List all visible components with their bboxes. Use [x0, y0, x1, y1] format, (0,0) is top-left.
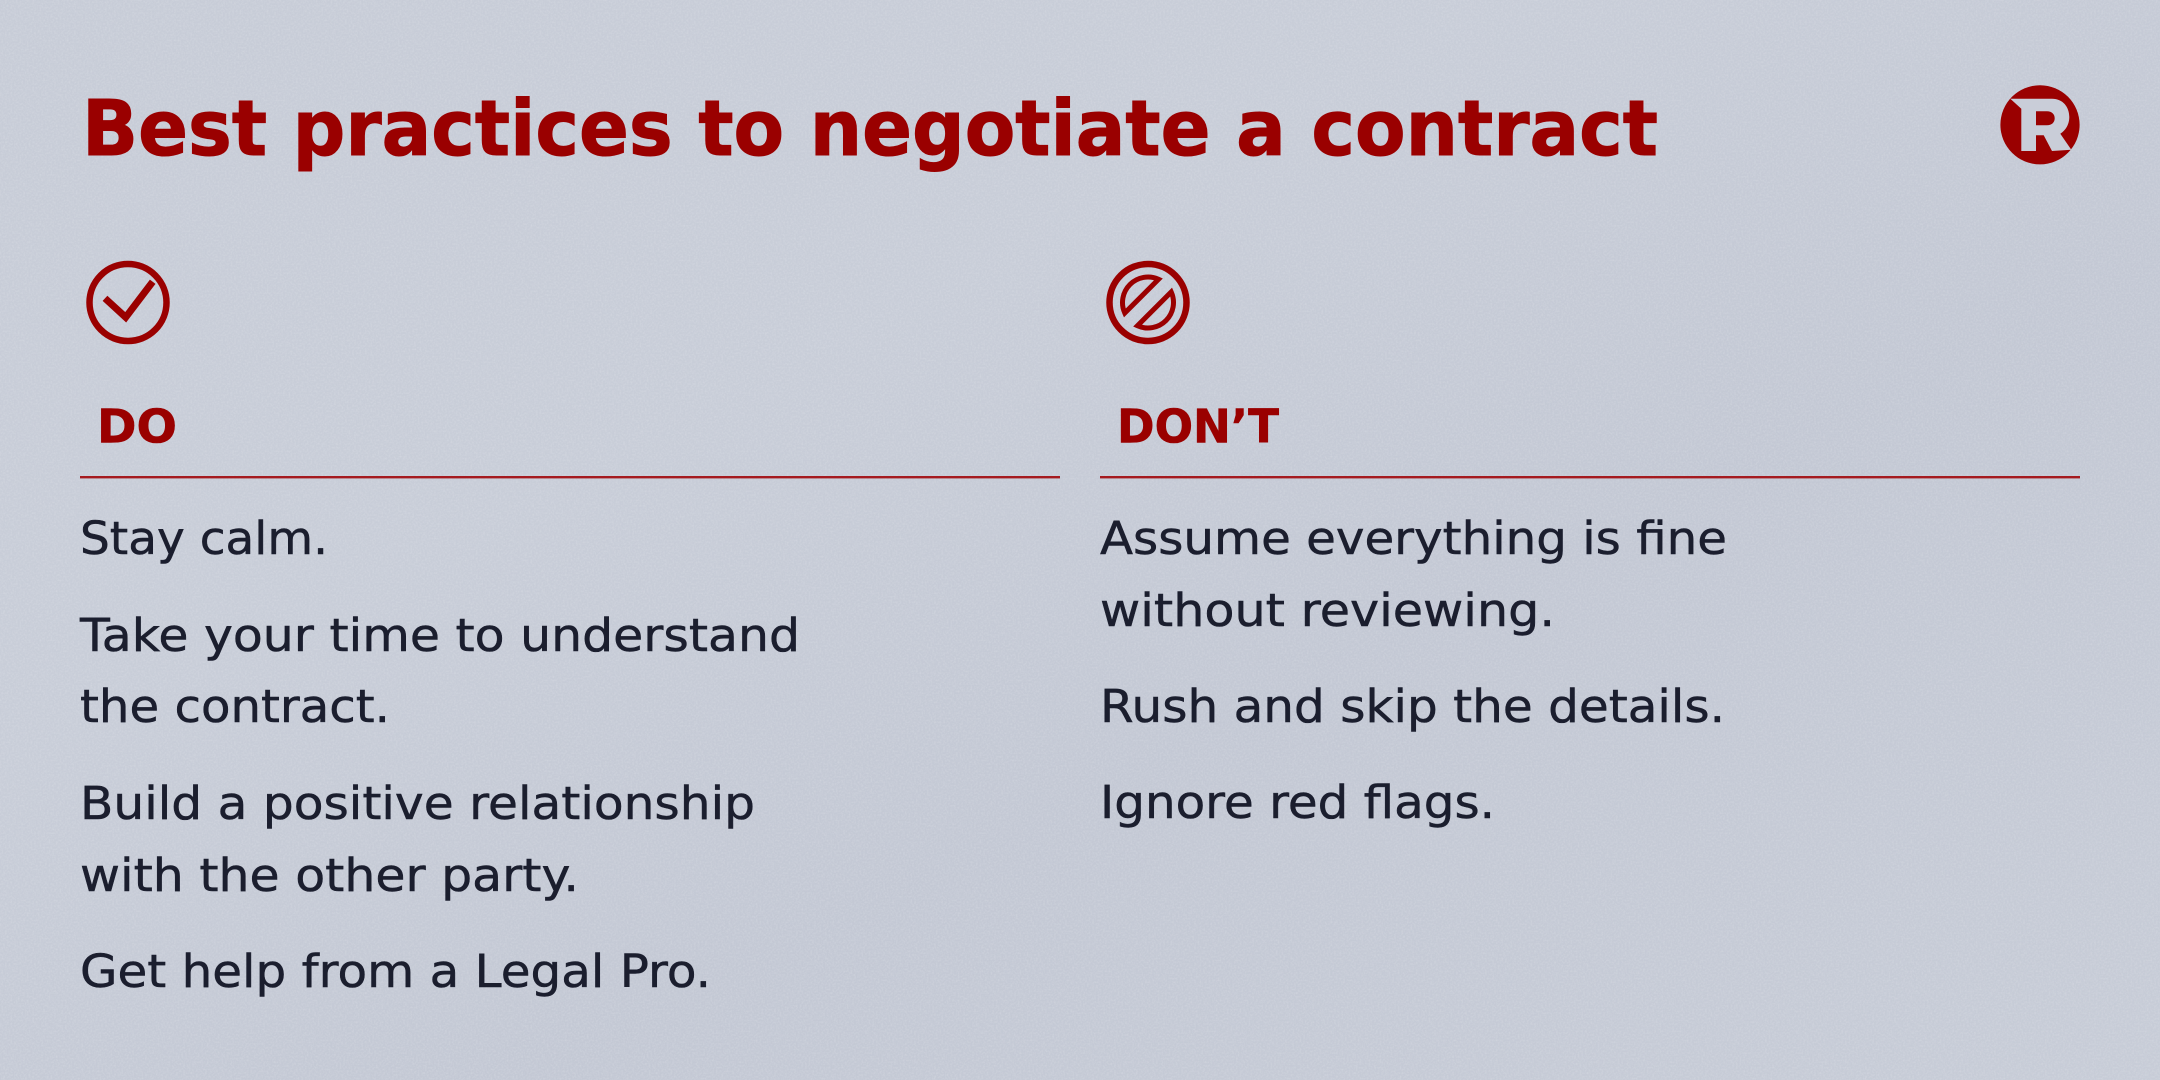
panel: don't: [1100, 264, 2080, 829]
text: build a relationship: Build a positive relationship: [80, 777, 755, 830]
text: build a relationship: with the other party.: [80, 849, 579, 902]
text: stay calm: Stay calm.: [80, 512, 328, 565]
text: take your time: the contract.: [80, 680, 390, 733]
icon: prohibited sign: [1110, 264, 1186, 341]
divider: do: [80, 476, 1060, 478]
heading: do: DO: [97, 400, 177, 454]
text: take your time: [79, 609, 800, 733]
text: rush: Rush and skip the details.: [1100, 680, 1725, 733]
text: take your time: Take your time to understand: [79, 609, 800, 662]
text: assume everything: without reviewing.: [1100, 584, 1555, 637]
divider: don't: [1100, 476, 2080, 478]
text: assume everything: Assume everything is fine: [1100, 512, 1727, 565]
text: ignore red flags: Ignore red flags.: [1100, 776, 1495, 829]
icon: logo: [2000, 85, 2080, 164]
text: get help: Get help from a Legal Pro.: [80, 945, 711, 998]
icon: check mark in circle: [90, 264, 166, 341]
title: Best practices to negotiate a contract: [82, 85, 1658, 174]
text: build a relationship: [80, 777, 755, 902]
heading: don't: DON’T: [1117, 400, 1279, 454]
text: assume everything: [1100, 512, 1727, 637]
panel: do: [79, 264, 1060, 998]
